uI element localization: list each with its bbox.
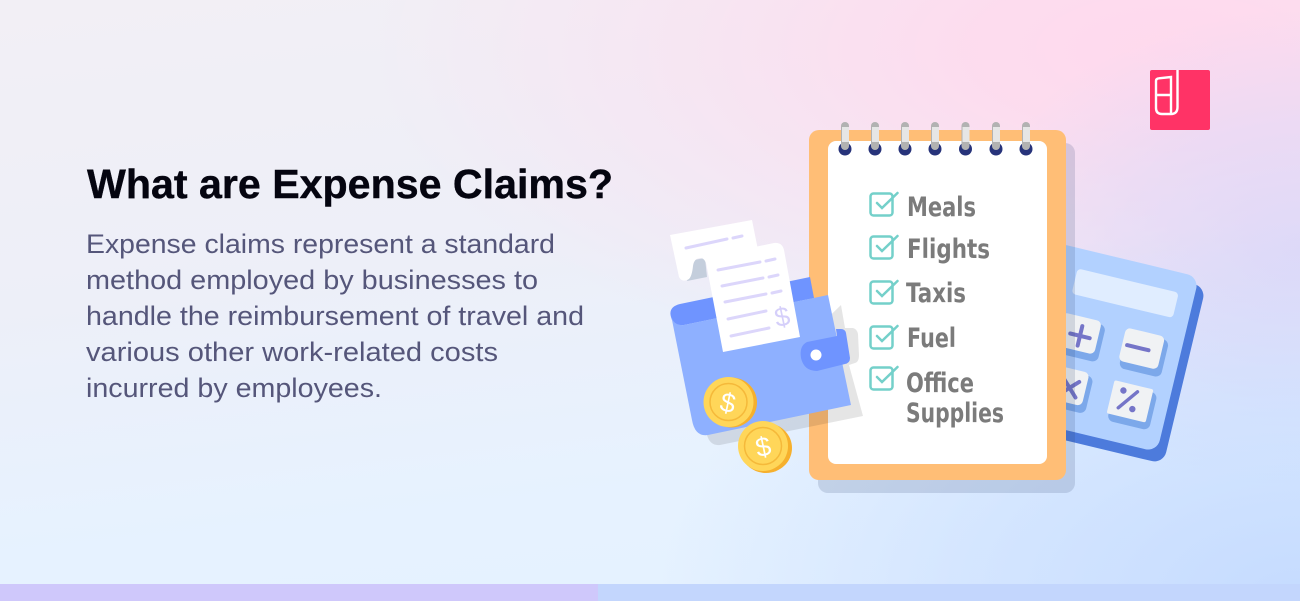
key: multiply: [1041, 364, 1094, 414]
key: percent: [1105, 380, 1158, 431]
wallet shadow: [707, 305, 863, 445]
description text block: method employed by businesses to: [86, 265, 538, 295]
wallet front: [671, 295, 851, 435]
checklist labels: Flights: [907, 234, 990, 265]
receipt: front: $: [772, 301, 793, 333]
coin: upper: $: [717, 387, 738, 419]
checklist labels: Fuel: [907, 323, 956, 354]
illustration: calculator: [980, 235, 1208, 464]
illustration: notepad: [809, 122, 1075, 493]
bottom colour bar: [0, 584, 1300, 601]
checklist labels: Meals: [907, 192, 976, 223]
checklist labels: Taxis: [906, 278, 966, 309]
description text block: [86, 229, 584, 403]
logo: [1150, 70, 1210, 130]
wallet clasp: [801, 329, 850, 371]
key: minus: [1117, 327, 1170, 378]
key: plus: [1053, 312, 1107, 363]
description text block: various other work-related costs: [86, 337, 498, 367]
checklist labels: Office: [906, 368, 974, 399]
title: What are Expense Claims?: [87, 161, 613, 207]
coin: lower: $: [753, 431, 774, 463]
wallet back flap: [670, 277, 814, 325]
calculator display: [1072, 268, 1179, 318]
checklist checkboxes: [870, 193, 898, 390]
checklist labels: Supplies: [906, 398, 1004, 429]
coin: upper: [704, 377, 757, 428]
description text block: Expense claims represent a standard: [86, 229, 555, 259]
coin: lower: [738, 421, 792, 473]
description text block: incurred by employees.: [86, 373, 382, 403]
illustration: wallet with receipts and coins: [670, 220, 863, 473]
receipt: front: [701, 243, 800, 352]
description text block: handle the reimbursement of travel and: [86, 301, 584, 331]
spiral rings: [838, 122, 1032, 156]
receipt: back: [670, 220, 758, 281]
checklist labels: [906, 192, 1004, 429]
